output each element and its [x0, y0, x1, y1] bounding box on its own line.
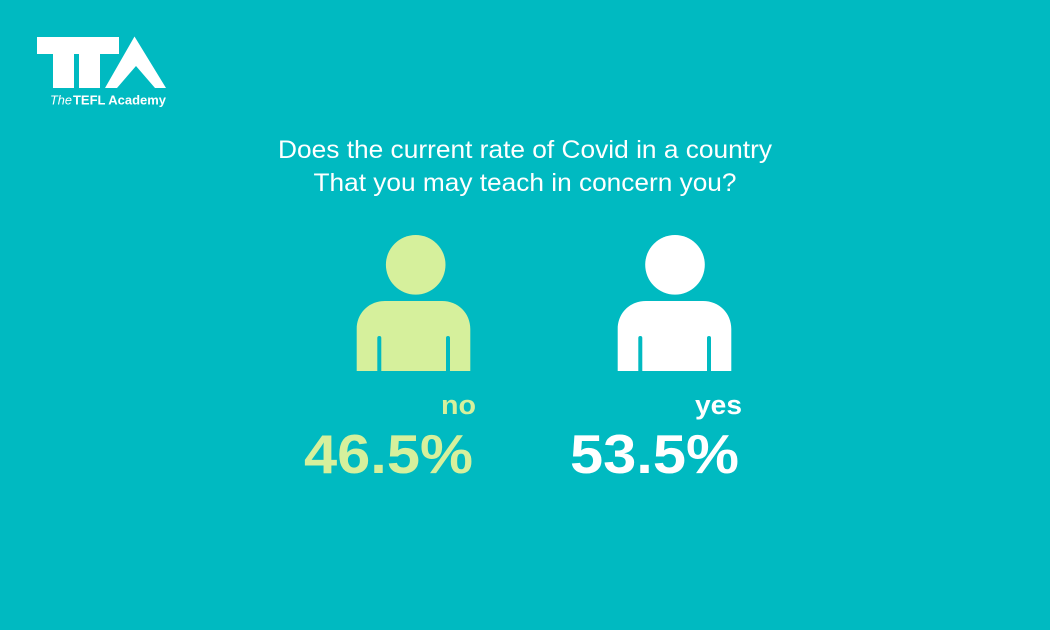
value: 46.5%: 46.5%: [304, 423, 473, 485]
title question: [278, 136, 773, 197]
value: 53.5%: 53.5%: [570, 423, 739, 485]
logo wordmark: TEFL Academy: [73, 94, 166, 108]
logo mark: TTA: [37, 36, 166, 88]
label: yes: yes: [695, 390, 742, 420]
icon: person yes: [618, 235, 731, 371]
logo wordmark: The: [50, 94, 72, 108]
icon: person no: [357, 235, 470, 371]
title question: That you may teach in concern you?: [314, 169, 736, 197]
logo: The TEFL Academy: [37, 36, 166, 108]
title question: Does the current rate of Covid in a country: [278, 136, 773, 164]
label: no: no: [441, 390, 476, 420]
